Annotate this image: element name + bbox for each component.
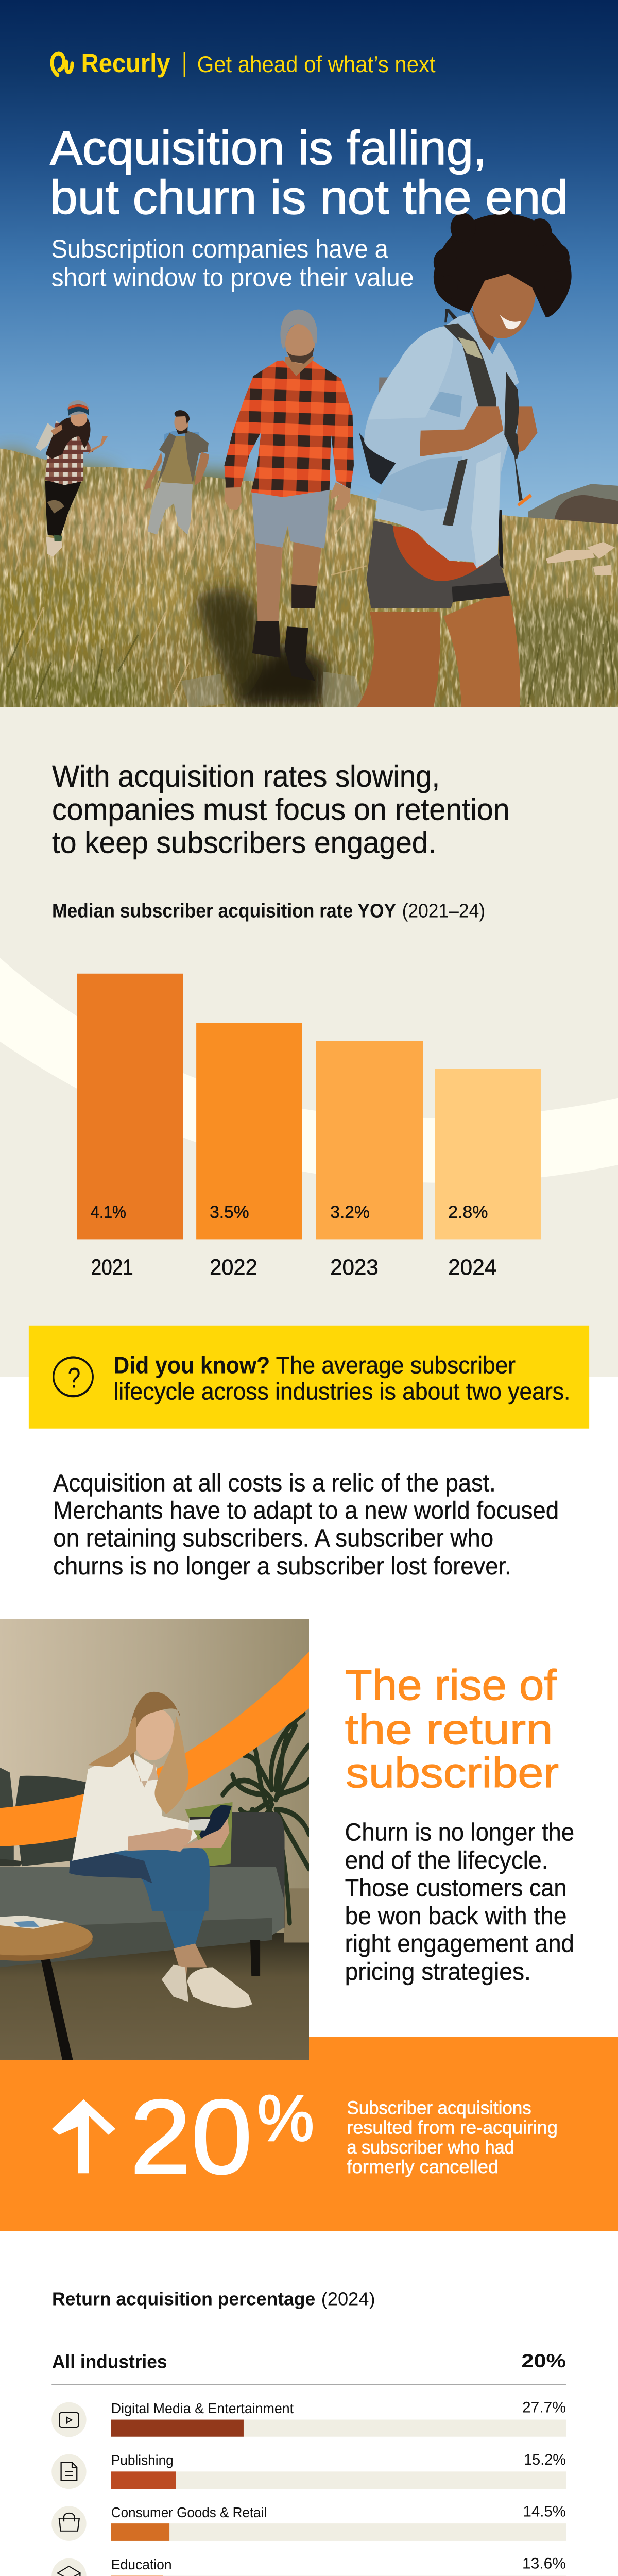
big number: 20 [130,2078,252,2196]
icon: up arrow [52,2099,115,2173]
hiker: woman far left [36,400,108,557]
callout: did you know [29,1326,589,1429]
bar 2021 [77,974,183,1280]
callout text: lifecycle across industries is about two years. [113,1378,570,1404]
all industries total [52,2350,566,2385]
all industries total: 20% [521,2350,566,2371]
bar 2021: 4.1% [91,1202,126,1222]
icon: question mark [54,1357,93,1396]
all industries total: All industries [52,2351,167,2372]
stat description: resulted from re-acquiring [347,2117,558,2138]
text block: churn is no longer the end [345,1819,574,1986]
text block: acquisition at all costs [53,1469,559,1580]
intro heading: companies must focus on retention [52,792,510,827]
icon: Recurly mark [52,54,72,75]
stat: up 20 percent: % [258,2082,314,2155]
face [471,309,495,350]
row: digital media [52,2399,566,2437]
subtitle [51,234,414,292]
row: digital media: Digital Media & Entertainment [111,2400,294,2416]
divider [184,52,185,77]
chart title: (2024) [321,2289,375,2310]
sofa [0,1768,14,1866]
photo: woman on sofa with phone and card [0,1619,309,2061]
panel: acquisition rate section background [0,707,618,1377]
heading: the rise of the return subscriber: the return [345,1706,553,1753]
chart title: Median subscriber acquisition rate YOY [52,901,396,922]
bar 2022: 2022 [210,1256,258,1280]
intro heading [52,759,510,860]
row: publishing: 15.2% [524,2451,566,2468]
text block: churn is no longer the end: Those customers can [345,1875,567,1902]
row: consumer goods: Consumer Goods & Retail [111,2504,267,2520]
text block: acquisition at all costs: churns is no longer a subscriber lost forever. [53,1553,511,1580]
heading: the rise of the return subscriber: The rise of [345,1662,557,1709]
row: education: Education [111,2556,172,2572]
tagline: Get ahead of what’s next [197,51,436,77]
bar 2021: 2021 [91,1256,133,1280]
chart title: (2021–24) [402,901,485,922]
coffee table with magazine [0,1916,93,2060]
curly hair [434,209,572,317]
hiker: man with vest and backpack [143,410,209,535]
text block: churn is no longer the end: right engagement and [345,1930,574,1958]
title: Acquisition is falling, [50,122,487,175]
panel: hero photo with sky, hikers and grassy hillside [0,0,618,718]
text block: acquisition at all costs: Merchants have to adapt to a new world focused [53,1497,559,1524]
stat description: formerly cancelled [347,2156,499,2177]
row: publishing: Publishing [111,2452,174,2468]
intro heading: With acquisition rates slowing, [52,759,440,793]
title [50,122,568,225]
hiker: man in red plaid shirt [225,310,354,608]
wordmark: Recurly [81,49,170,78]
bar 2024: 2.8% [448,1202,488,1222]
hillside and grass [0,442,618,718]
row: education [52,2555,566,2576]
chart title [52,901,485,922]
bar 2024: 2024 [448,1256,496,1280]
hiker: woman in denim jacket, foreground [357,209,572,707]
bar 2023 [316,1041,423,1280]
text block: churn is no longer the end: Churn is no longer the [345,1819,574,1846]
panel: orange stat band [0,2037,618,2231]
text block: churn is no longer the end: pricing strategies. [345,1958,531,1986]
decorative swoosh behind bars [0,958,618,1183]
bar 2023: 3.2% [330,1202,370,1222]
text block: acquisition at all costs: Acquisition at all costs is a relic of the past. [53,1469,496,1497]
icon: question mark: ? [68,1362,80,1394]
chart title: Return acquisition percentage [52,2289,315,2310]
plant [222,1714,309,1923]
stat description: a subscriber who had [347,2137,514,2158]
stat: up 20 percent [52,2078,558,2196]
callout text [113,1352,570,1404]
orange swoosh [0,1652,309,1846]
logo: Recurly header [52,49,436,78]
bar 2024 [435,1069,541,1280]
intro heading: to keep subscribers engaged. [52,825,436,860]
row: consumer goods [52,2503,566,2541]
bar 2022 [196,1023,302,1280]
bar 2022: 3.5% [210,1202,249,1222]
heading: the rise of the return subscriber [345,1662,559,1797]
callout text: The average subscriber [276,1352,516,1379]
text block: churn is no longer the end: end of the lifecycle. [345,1847,548,1874]
text block: churn is no longer the end: be won back with the [345,1903,567,1930]
panel: return acquisition percentage chart [52,2289,566,2576]
man lower legs and boots [252,543,315,681]
stat description: Subscriber acquisitions [347,2097,531,2118]
stat description [347,2097,558,2177]
subtitle: Subscription companies have a [51,234,388,263]
heading: the rise of the return subscriber: subscriber [346,1749,559,1797]
row: education: 13.6% [522,2555,566,2572]
row: digital media: 27.7% [522,2399,566,2416]
bar chart: median acquisition rate [77,974,541,1280]
floor [0,1933,309,2061]
row: publishing [52,2451,566,2489]
woman seated [69,1692,252,2008]
title: but churn is not the end [50,172,568,225]
bar 2023: 2023 [330,1256,379,1280]
row: consumer goods: 14.5% [523,2503,566,2520]
sky background [0,0,618,517]
text block: acquisition at all costs: on retaining subscribers. A subscriber who [53,1524,493,1552]
callout text: Did you know? [113,1352,270,1379]
subtitle: short window to prove their value [51,263,414,292]
